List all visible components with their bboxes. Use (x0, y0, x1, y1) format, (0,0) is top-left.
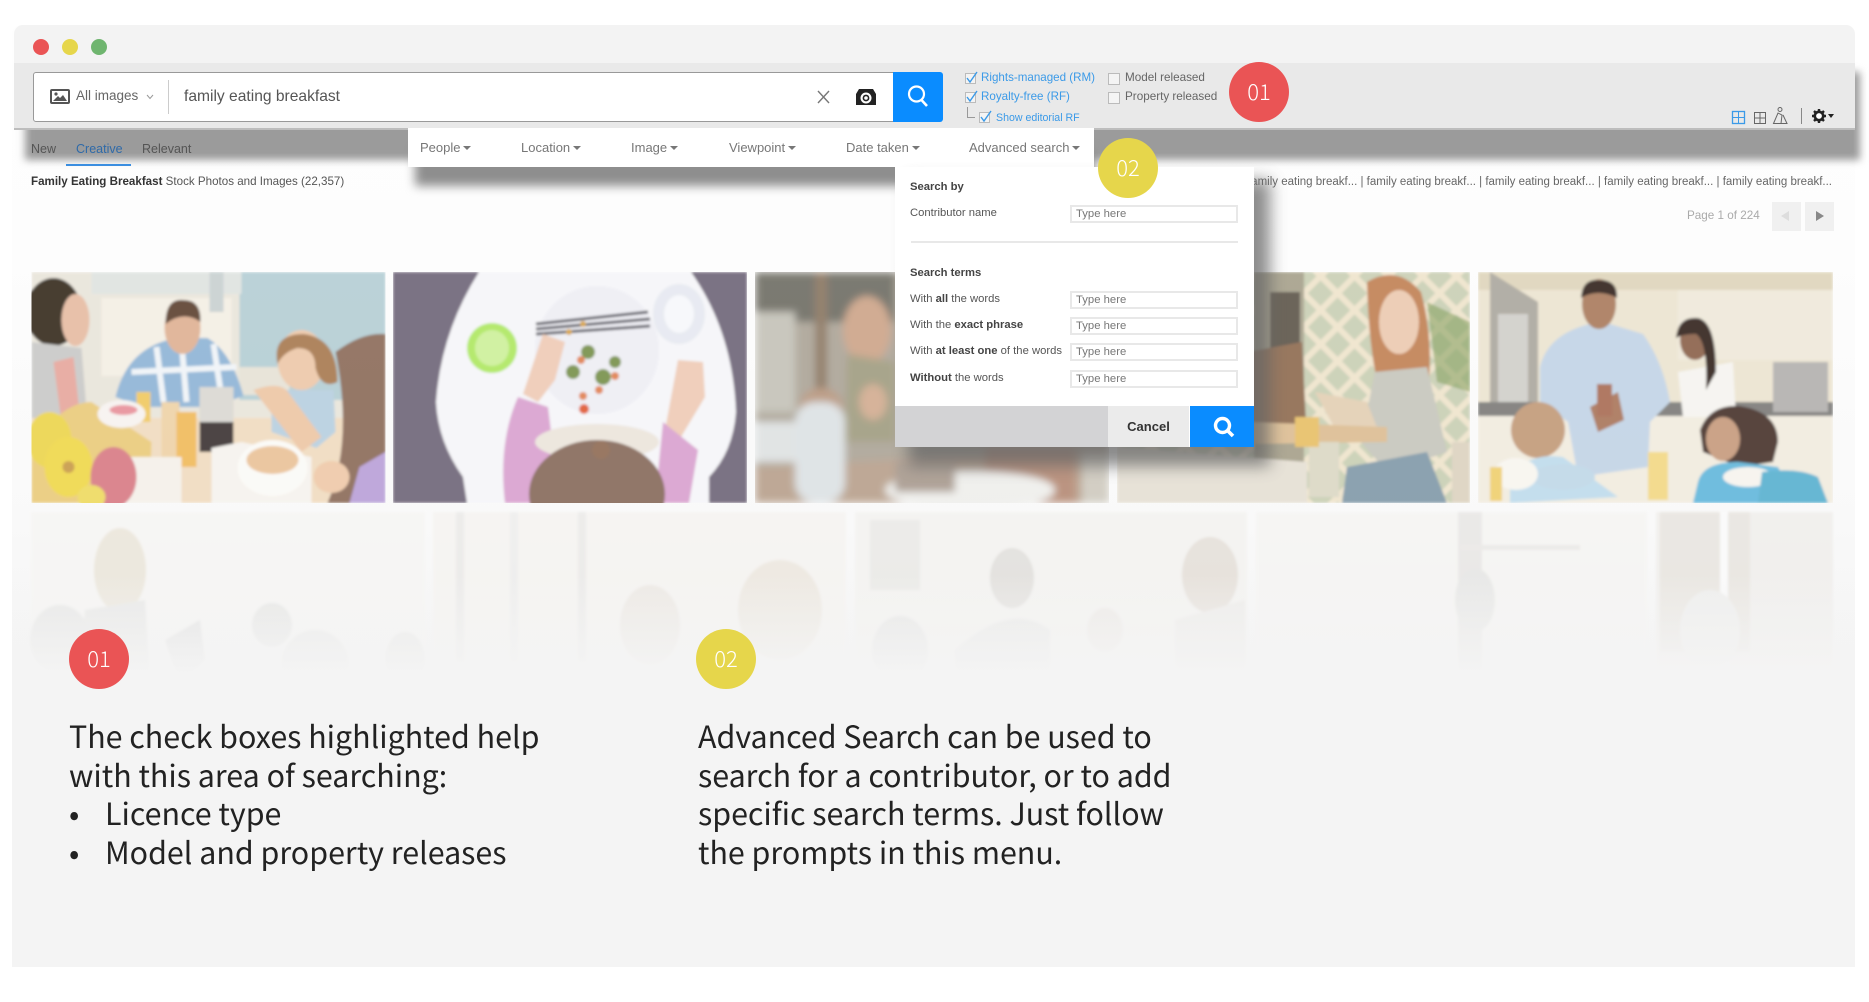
line: search for a contributor, or to add (698, 752, 1172, 796)
fade overlay (12, 575, 1855, 675)
icon: search (1214, 416, 1234, 438)
check: model released (1108, 73, 1120, 85)
pagination label: Page 1 of 224 (1687, 209, 1760, 222)
explanation 01 (69, 713, 539, 872)
search button (893, 72, 943, 122)
badge 01 on toolbar (1229, 62, 1289, 122)
arrow (1816, 211, 1824, 221)
panel footer (895, 406, 1108, 447)
tab: Relevant: Relevant (142, 142, 191, 156)
advanced search panel shadow (908, 180, 1270, 466)
filter: Location: Location (521, 140, 570, 155)
input: contributor: Type here (1076, 208, 1126, 220)
label: show editorial: Show editorial RF (996, 112, 1080, 124)
next page button (1805, 202, 1834, 231)
photo: child at high chair from above (393, 272, 747, 503)
input: without: Type here (1076, 373, 1126, 385)
explanation 02 (698, 713, 1172, 872)
related searches: family eating breakf... | family eating breakf... | family eating breakf... | family eating breakf... | family eating breakf... (1254, 176, 1832, 188)
search box (33, 72, 943, 122)
photo: couple on patio with lattice (1117, 272, 1470, 503)
line: specific search terms. Just follow (698, 790, 1164, 834)
divider (911, 241, 1238, 243)
badge 02 on menu (1098, 138, 1158, 198)
label: at least one: With at least one of the words (910, 345, 1062, 357)
icon: search (908, 85, 928, 107)
badge 02 in explanation (696, 629, 756, 689)
fade cover (12, 675, 1855, 720)
icon: picture (50, 89, 70, 104)
label: royalty-free: Royalty-free (RF) (981, 90, 1070, 103)
results heading: Family Eating Breakfast Stock Photos and Images (22,357) (31, 175, 344, 188)
tab: New: New (31, 142, 56, 156)
label: model released: Model released (1125, 71, 1205, 84)
icon: clear (818, 90, 830, 104)
label: contributor: Contributor name (910, 207, 997, 219)
filter: Date taken: Date taken (846, 140, 909, 155)
check: rights-managed (965, 72, 978, 84)
search query: family eating breakfast (184, 88, 340, 105)
scope label: All images (76, 88, 138, 103)
icon: camera (856, 89, 876, 105)
window control: close (33, 39, 49, 55)
check: property released (1108, 92, 1120, 104)
line: Advanced Search can be used to (698, 713, 1152, 757)
advanced search panel (895, 167, 1254, 447)
input: all words: Type here (1076, 294, 1126, 306)
bullet: releases: • (69, 828, 79, 872)
active underline (66, 164, 131, 166)
check: show editorial (979, 110, 992, 123)
label: property released: Property released (1125, 90, 1217, 103)
bullet: releases: Model and property releases (105, 828, 506, 872)
previous page button (1772, 202, 1801, 231)
input: at least one (1070, 343, 1238, 361)
filter: People: People (420, 140, 460, 155)
heading: search by: Search by (910, 181, 964, 193)
input: without (1070, 370, 1238, 388)
photo: blurred man at restaurant table (755, 272, 1109, 510)
badge 02 in explanation: 02 (714, 642, 738, 674)
input: exact phrase (1070, 317, 1238, 335)
label: rights-managed: Rights-managed (RM) (981, 71, 1095, 84)
title bar (14, 25, 1855, 63)
label: exact phrase: With the exact phrase (910, 319, 1023, 331)
badge 01 in explanation (69, 629, 129, 689)
advanced search button (1190, 406, 1254, 447)
bullet: licence type: Licence type (105, 790, 281, 834)
badge 01 on toolbar: 01 (1247, 75, 1271, 107)
filter: Viewpoint: Viewpoint (729, 140, 785, 155)
input: all words (1070, 291, 1238, 309)
bullet: licence type: • (69, 790, 79, 834)
filter menu (408, 128, 1094, 167)
separator (168, 80, 169, 114)
toolbar (14, 63, 1855, 130)
input: contributor (1070, 205, 1238, 223)
input: at least one: Type here (1076, 346, 1126, 358)
badge 01 in explanation: 01 (87, 642, 111, 674)
result tabs (31, 142, 192, 166)
filter: Advanced search: Advanced search (969, 140, 1069, 155)
search field (33, 72, 894, 122)
heading: search terms: Search terms (910, 267, 981, 279)
line: the prompts in this menu. (698, 828, 1062, 872)
cancel button: Cancel (1127, 419, 1170, 434)
filter menu shadow (415, 150, 1095, 186)
label: all words: With all the words (910, 293, 1000, 305)
photo: family in kitchen (1478, 272, 1833, 503)
photo grid (32, 272, 1833, 634)
filter: Image: Image (631, 140, 667, 155)
window control: minimise (62, 39, 78, 55)
chevron (146, 94, 154, 100)
toolbar shadow (25, 72, 1860, 160)
badge 02 on menu: 02 (1116, 151, 1140, 183)
connector (967, 107, 975, 118)
photo: family at breakfast table (26, 272, 386, 509)
faded second row of photos (30, 512, 1833, 710)
label: without: Without the words (910, 372, 1004, 384)
window control: maximise (91, 39, 107, 55)
view icons (1732, 107, 1834, 124)
tab: Creative: Creative (76, 142, 123, 156)
arrow (1781, 211, 1789, 221)
line: The check boxes highlighted help (69, 713, 539, 757)
cancel button (1108, 406, 1189, 447)
licence checkboxes (965, 71, 1217, 124)
line: with this area of searching: (69, 752, 447, 796)
input: exact phrase: Type here (1076, 320, 1126, 332)
check: royalty-free (965, 90, 978, 103)
